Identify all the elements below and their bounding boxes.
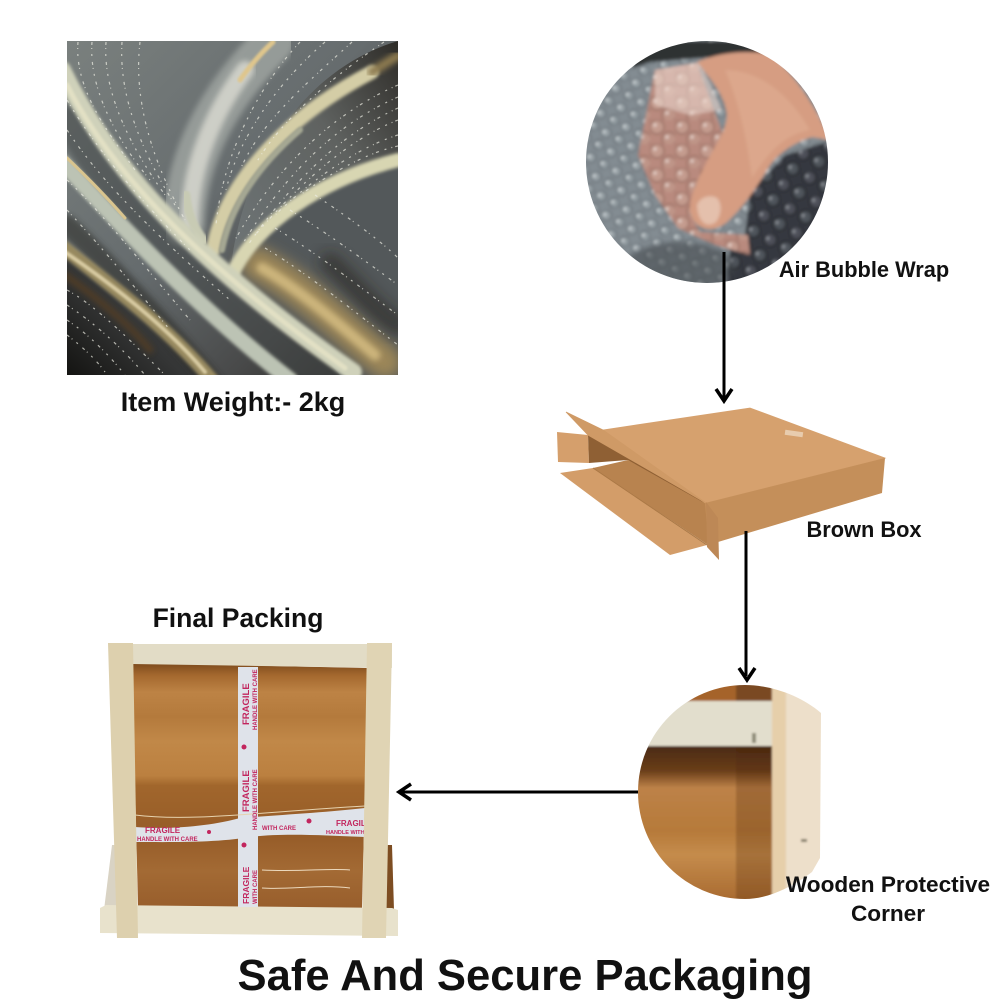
front side [705,458,885,542]
photo: air bubble wrap in hand [586,41,828,283]
gold smear: lower right [258,264,385,362]
dotted glitter lines [67,42,398,375]
caption: air bubble wrap: Air Bubble Wrap [779,257,949,282]
dark under bands [67,120,330,380]
top face [603,408,885,503]
photo: final packed wooden crate [100,643,398,938]
tape print: FRAGILE [241,683,252,725]
tape print: FRAGILE [241,866,251,904]
inner dark [588,435,708,515]
tape print: FRAGILE [241,770,252,812]
tape print: WITH CARE [262,826,296,832]
arrow: box to wooden corner [739,531,755,680]
tape print: HANDLE WITH CARE [253,769,259,830]
corner flap [706,502,719,560]
tape print [137,669,372,904]
cream feather: upper [213,72,372,250]
second band [62,162,290,380]
tape print: HANDLE WITH CARE [253,669,259,730]
silver feather: center [184,42,273,225]
arrow: wooden corner to final packing [399,784,638,800]
tape print: FRAGILE [336,819,372,828]
caption: final packing: Final Packing [153,603,323,633]
tape print: WITH CARE [253,870,259,904]
title: Safe And Secure Packaging [238,952,812,1000]
left post [108,643,138,938]
caption: wooden protective corner: Corner [851,901,925,926]
top flap [566,412,706,503]
horizontal tape [135,808,365,842]
caption: brown box: Brown Box [806,517,922,542]
caption: item weight: Item Weight:- 2kg [121,387,345,417]
caption: wooden protective corner: Wooden Protective [786,872,990,897]
main cream band [62,70,353,372]
photo: brown cardboard box [557,408,885,560]
photo: wooden protective corner [638,685,821,899]
painting: abstract feather artwork [60,41,398,385]
cream feather: right [233,160,398,273]
lower bubble shadow [630,239,734,283]
left flap [557,432,589,463]
right post [362,643,392,938]
gold band [60,245,212,380]
top rail [108,644,392,668]
tape print: HANDLE WITH CARE [137,837,198,843]
crate box face [132,663,368,908]
vertical tape [238,667,258,907]
arrow: bubble wrap to box [716,252,732,401]
tape print: HANDLE WITH [326,830,365,836]
box label sticker [785,430,803,437]
bottom rail [100,905,398,936]
bottom flap [560,468,707,555]
tape print: FRAGILE [145,826,181,835]
